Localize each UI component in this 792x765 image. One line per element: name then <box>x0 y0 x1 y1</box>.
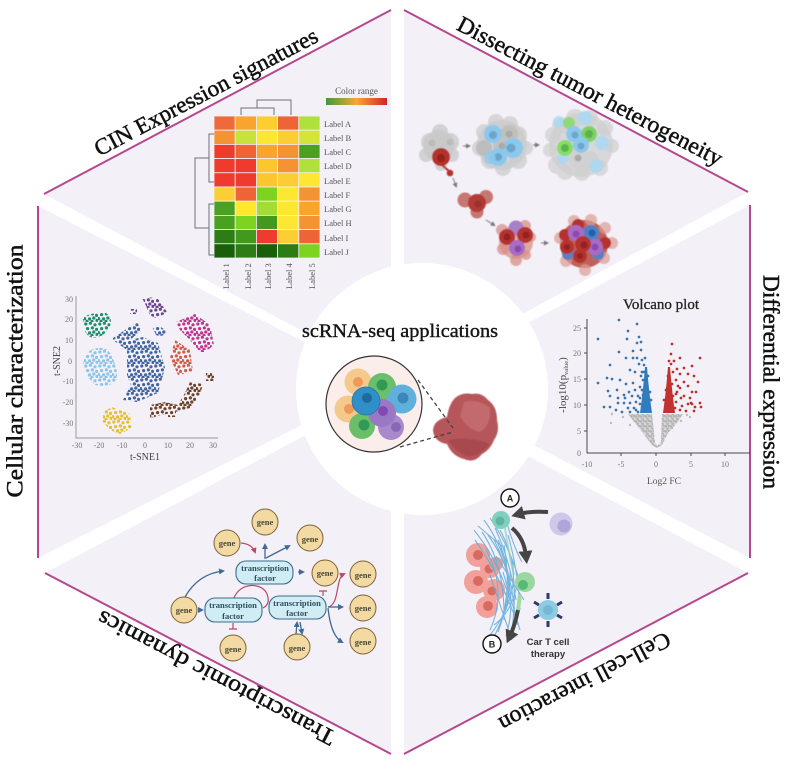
heatmap row labels: Label I <box>324 233 348 243</box>
zoomed cell circle <box>326 356 422 452</box>
zoom dashed lines <box>400 380 453 447</box>
t-SNE axis labels: t-SNE1 <box>130 452 160 463</box>
transcription factor boxes: factor <box>222 611 244 621</box>
t-SNE scatter chart: t-SNE2 <box>52 346 63 376</box>
blue-gray clone <box>472 114 533 176</box>
heatmap column labels <box>221 263 317 289</box>
t-SNE scatter chart <box>52 295 218 463</box>
gene labels: gene <box>355 637 371 647</box>
heatmap row labels: Label E <box>324 176 351 186</box>
gene labels: gene <box>302 534 318 544</box>
CAR T label <box>527 637 569 660</box>
center title: scRNA-seq applications <box>302 321 498 342</box>
purple immune cell <box>550 512 572 536</box>
volcano tick labels: -5 <box>618 460 624 469</box>
t-SNE tick labels: 30 <box>65 295 73 304</box>
t-SNE tick labels: 10 <box>65 336 73 345</box>
volcano tick labels: 25 <box>573 324 581 333</box>
gene labels: gene <box>219 538 235 548</box>
heatmap row labels: Label B <box>324 133 351 143</box>
heatmap row labels: Label F <box>324 190 350 200</box>
t-SNE clusters <box>83 297 214 434</box>
transcription factor boxes: transcription <box>273 598 321 608</box>
heading: CIN Expression signatures: CIN Expression signatures <box>90 23 322 161</box>
gene labels: gene <box>176 605 192 615</box>
arrows <box>185 543 344 642</box>
heading: Differential expression: Differential expression <box>758 275 783 489</box>
transcription factor boxes: transcription <box>241 563 289 573</box>
t-SNE tick labels: 0 <box>68 357 72 366</box>
heatmap row labels: Label C <box>324 147 351 157</box>
extracellular fibers <box>474 518 524 640</box>
volcano tick labels: 10 <box>573 401 581 410</box>
panel: cell-cell interaction <box>404 390 748 754</box>
evolution arrows <box>453 145 547 243</box>
volcano non-significant gray points <box>611 414 690 448</box>
heatmap row labels: Label A <box>324 119 352 129</box>
volcano down-regulated blue points <box>598 320 652 413</box>
volcano plot: -log10(p <box>557 375 569 413</box>
label B <box>483 635 501 653</box>
teal cell <box>492 511 514 575</box>
center illustration: tumor and zoomed cells <box>326 356 498 461</box>
color range legend: Color range <box>335 86 378 96</box>
heading: Dissecting tumor heterogeneity: Dissecting tumor heterogeneity <box>453 11 727 171</box>
panel: dissecting tumor heterogeneity <box>404 10 748 378</box>
volcano up-regulated red points <box>663 344 701 413</box>
heatmap column labels: Label 4 <box>284 263 294 289</box>
t-SNE tick labels: 20 <box>65 315 73 324</box>
t-SNE tick labels: -30 <box>72 441 82 450</box>
t-SNE tick labels: -30 <box>63 419 73 428</box>
mixed red-purple-blue clone <box>554 214 618 276</box>
t-SNE tick labels: 20 <box>186 441 194 450</box>
t-SNE tick labels: -10 <box>63 377 73 386</box>
volcano tick labels: 0 <box>577 449 581 458</box>
early gray clone <box>419 124 459 176</box>
t-SNE tick labels: 10 <box>164 441 172 450</box>
heatmap chart <box>195 86 387 289</box>
t-SNE tick labels <box>63 295 217 450</box>
volcano tick labels: 5 <box>689 460 693 469</box>
gene labels: gene <box>257 517 273 527</box>
t-SNE tick labels: -10 <box>117 441 127 450</box>
CAR T label: Car T cell <box>527 637 569 648</box>
heading: Transcriptomic dynamics: Transcriptomic dynamics <box>93 605 339 750</box>
volcano title: Volcano plot <box>623 297 700 313</box>
volcano tick labels <box>573 324 729 469</box>
volcano plot: value <box>563 361 570 375</box>
transcription factor boxes <box>205 561 326 622</box>
t-SNE tick labels: -20 <box>94 441 104 450</box>
t-SNE axes <box>76 296 218 438</box>
t-SNE tick labels: 0 <box>143 441 147 450</box>
volcano axis labels: Log2 FC <box>647 477 681 487</box>
volcano axes <box>584 319 750 456</box>
t-SNE tick labels: 30 <box>209 441 217 450</box>
CAR T label: therapy <box>531 649 566 660</box>
panel: transcriptomic dynamics <box>45 390 391 754</box>
volcano tick labels: 5 <box>577 427 581 436</box>
heatmap cells <box>214 116 320 258</box>
tumor cells <box>464 543 505 618</box>
cell-cell interaction illustration <box>464 489 572 660</box>
gene labels: gene <box>355 570 371 580</box>
heatmap row labels: Label J <box>324 247 349 257</box>
heatmap row labels: Label D <box>324 161 352 171</box>
volcano tick labels: 20 <box>573 349 581 358</box>
volcano tick labels: 0 <box>654 460 658 469</box>
dendrograms <box>195 100 291 255</box>
curved interaction arrows <box>510 512 548 636</box>
panel: CIN expression signatures <box>44 10 391 378</box>
heatmap column labels: Label 1 <box>221 263 231 289</box>
transcription factor boxes: transcription <box>209 600 257 610</box>
t-SNE tick labels: -20 <box>63 398 73 407</box>
label A <box>501 489 519 507</box>
volcano tick labels: 15 <box>573 375 581 384</box>
heatmap column labels: Label 2 <box>243 263 253 289</box>
blue-green-gray clone <box>543 109 619 181</box>
volcano tick labels: 10 <box>721 460 729 469</box>
tumor <box>433 394 498 461</box>
gene nodes <box>171 509 376 661</box>
gene labels: gene <box>289 643 305 653</box>
gene labels <box>176 517 371 654</box>
heatmap column labels: Label 3 <box>263 263 273 289</box>
panel: differential expression <box>415 205 750 558</box>
transcription factor boxes: factor <box>286 608 308 618</box>
tumor heterogeneity clonal evolution diagram <box>419 109 619 276</box>
CAR T cell <box>534 593 562 627</box>
label B: B <box>489 640 496 650</box>
red-purple clone <box>496 220 536 266</box>
panel: cellular characterization <box>38 206 385 558</box>
small red clone <box>458 190 493 218</box>
heading: Cell-cell interaction: Cell-cell interaction <box>495 627 675 737</box>
label A: A <box>507 494 514 504</box>
heatmap row labels: Label G <box>324 204 352 214</box>
central white circle <box>296 263 548 515</box>
gene labels: gene <box>355 603 371 613</box>
heatmap column labels: Label 5 <box>307 263 317 289</box>
heatmap row labels <box>324 119 352 257</box>
green cell <box>515 572 535 610</box>
gene labels: gene <box>317 568 333 578</box>
gene regulatory network <box>171 509 376 661</box>
heatmap row labels: Label H <box>324 218 352 228</box>
gene labels: gene <box>225 644 241 654</box>
volcano plot: ) <box>557 357 569 361</box>
volcano tick labels: -10 <box>582 460 592 469</box>
volcano plot <box>557 297 750 487</box>
heading: Cellular characterization: Cellular characterization <box>3 244 28 497</box>
transcription factor boxes: factor <box>254 573 276 583</box>
color range legend <box>326 86 387 105</box>
